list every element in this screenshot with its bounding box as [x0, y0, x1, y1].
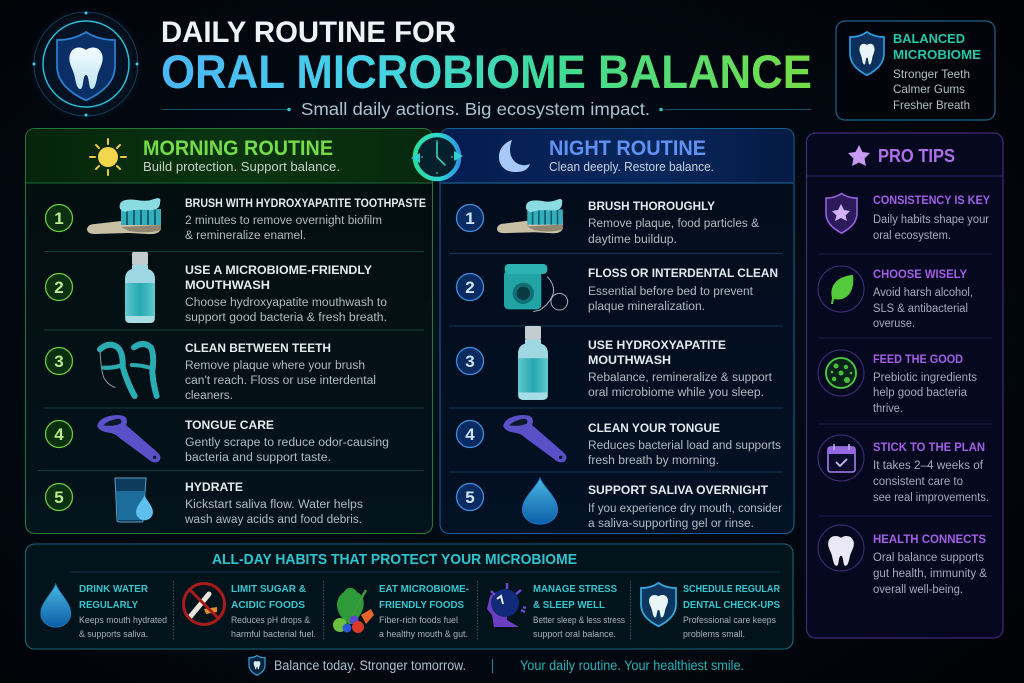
night step 2: 2	[465, 278, 475, 297]
title line 1: DAILY ROUTINE FOR	[161, 16, 456, 49]
tip: feed the good: help good bacteria	[873, 387, 968, 399]
habit: food: EAT MICROBIOME-	[379, 583, 469, 595]
habit: stress and sleep: & SLEEP WELL	[533, 599, 606, 611]
icon: glass of water	[115, 478, 153, 522]
habit: dental check-up: problems small.	[683, 629, 745, 640]
tip: choose wisely	[818, 266, 973, 330]
tip: stick to the plan: STICK TO THE PLAN	[873, 442, 985, 454]
habit: stress and sleep: Better sleep & less stress	[533, 615, 625, 626]
night step 4: 4	[465, 425, 475, 444]
night subheading: Clean deeply. Restore balance.	[549, 160, 714, 174]
footer left tagline: Balance today. Stronger tomorrow.	[274, 658, 466, 673]
balanced list: Stronger Teeth	[893, 67, 970, 81]
tip: consistency	[826, 194, 990, 242]
night step 5	[456, 478, 782, 530]
habit: water	[41, 583, 167, 640]
night step 3: MOUTHWASH	[588, 355, 671, 367]
tip: feed the good	[818, 350, 977, 415]
night heading: NIGHT ROUTINE	[549, 137, 706, 160]
morning step 4	[46, 415, 389, 464]
morning step 5: HYDRATE	[185, 482, 243, 494]
icon: floss box	[504, 264, 568, 312]
morning step 2: USE A MICROBIOME-FRIENDLY	[185, 265, 372, 277]
morning step 2: Choose hydroxyapatite mouthwash to	[185, 297, 387, 309]
habit: dental check-up	[641, 583, 780, 640]
footer	[249, 656, 744, 675]
panel: pro tips	[806, 133, 1003, 638]
tip: stick to the plan	[818, 435, 989, 504]
footer right tagline: Your daily routine. Your healthiest smile.	[520, 658, 744, 673]
balanced list: Fresher Breath	[893, 98, 970, 112]
balanced heading	[893, 32, 981, 62]
habit: stress and sleep: MANAGE STRESS	[533, 583, 617, 595]
tip: consistency: Daily habits shape your	[873, 214, 989, 226]
morning step 3: Remove plaque where your brush	[185, 360, 365, 372]
tip: feed the good: FEED THE GOOD	[873, 354, 963, 366]
tip: consistency: CONSISTENCY IS KEY	[873, 195, 990, 207]
morning step 3: 3	[54, 352, 64, 371]
night step 3: oral microbiome while you sleep.	[588, 387, 764, 399]
title line 2: ORAL MICROBIOME BALANCE	[161, 45, 812, 98]
tip: health connects: gut health, immunity &	[873, 568, 987, 580]
tip: health connects: overall well-being.	[873, 584, 963, 596]
night step 1: 1	[465, 209, 475, 228]
tip: feed the good: thrive.	[873, 403, 903, 415]
icon: clock with circular arrows	[411, 134, 463, 180]
morning step 2: support good bacteria & fresh breath.	[185, 312, 387, 324]
morning step 2	[46, 252, 387, 324]
pro tips heading	[848, 145, 955, 166]
tip: choose wisely: Avoid harsh alcohol,	[873, 287, 973, 299]
habit: stress and sleep	[487, 583, 625, 640]
icon: sun	[90, 139, 126, 175]
balanced heading: MICROBIOME	[893, 48, 981, 62]
icon: flossers	[100, 344, 157, 396]
night step 5: 5	[465, 488, 475, 507]
habit: food	[333, 583, 469, 640]
morning step 5: wash away acids and food debris.	[184, 514, 362, 526]
panel: balanced microbiome	[836, 21, 995, 120]
night step 3: USE HYDROXYAPATITE	[588, 340, 726, 352]
morning step 2: MOUTHWASH	[185, 280, 270, 292]
night step 4	[456, 415, 781, 467]
balanced heading: BALANCED	[893, 32, 965, 46]
morning step 1	[46, 198, 426, 242]
morning step 4: 4	[54, 425, 64, 444]
icon: shield tooth	[850, 32, 884, 75]
habit: sugar: LIMIT SUGAR &	[231, 583, 306, 595]
night header	[441, 129, 793, 183]
habit: sugar: ACIDIC FOODS	[231, 599, 305, 611]
morning step 3	[46, 343, 376, 402]
night step 3: Rebalance, remineralize & support	[588, 372, 773, 384]
night step 4: Reduces bacterial load and supports	[588, 440, 781, 452]
tip: stick to the plan: see real improvements.	[873, 492, 989, 504]
morning step 1: 1	[54, 209, 64, 228]
habit: food: a healthy mouth & gut.	[379, 629, 468, 640]
morning step 3: CLEAN BETWEEN TEETH	[185, 343, 331, 355]
tip: health connects	[818, 525, 987, 596]
morning step 5: Kickstart saliva flow. Water helps	[185, 499, 363, 511]
night step 1: Remove plaque, food particles &	[588, 218, 759, 230]
morning step 3: can't reach. Floss or use interdental	[185, 375, 376, 387]
night step 2	[456, 264, 778, 313]
night step 3	[456, 326, 773, 400]
habit: sugar: harmful bacterial fuel.	[231, 629, 316, 640]
habit: water: REGULARLY	[79, 599, 138, 611]
night step 2: Essential before bed to prevent	[588, 286, 754, 298]
night step 1	[456, 199, 759, 246]
icon: footer shield	[249, 656, 265, 675]
morning step 4: Gently scrape to reduce odor-causing	[185, 437, 389, 449]
tip: feed the good: Prebiotic ingredients	[873, 372, 977, 384]
pro tips heading: PRO TIPS	[878, 145, 955, 166]
morning subheading: Build protection. Support balance.	[143, 160, 340, 174]
morning step 3: cleaners.	[185, 390, 233, 402]
tip: choose wisely: CHOOSE WISELY	[873, 269, 967, 281]
morning step 4: TONGUE CARE	[185, 420, 274, 432]
night step 1: daytime buildup.	[588, 234, 677, 246]
habit: dental check-up: DENTAL CHECK-UPS	[683, 599, 780, 611]
subtitle: Small daily actions. Big ecosystem impact.	[301, 99, 650, 119]
tip: stick to the plan: It takes 2–4 weeks of	[873, 460, 984, 472]
tip: consistency: oral ecosystem.	[873, 230, 951, 242]
tip: health connects: Oral balance supports	[873, 552, 984, 564]
tip: choose wisely: overuse.	[873, 318, 915, 330]
night step 2: FLOSS OR INTERDENTAL CLEAN	[588, 268, 778, 280]
tip: choose wisely: SLS & antibacterial	[873, 303, 968, 315]
habits heading: ALL-DAY HABITS THAT PROTECT YOUR MICROBIOME	[212, 551, 577, 568]
night step 2: plaque mineralization.	[588, 301, 705, 313]
panel: morning routine	[26, 128, 432, 534]
morning step 5	[46, 478, 363, 526]
balanced list: Calmer Gums	[893, 82, 965, 96]
habit: water: & supports saliva.	[79, 629, 148, 640]
balanced list	[893, 67, 970, 112]
header	[28, 6, 812, 122]
morning step 4: bacteria and support taste.	[185, 452, 331, 464]
night step 1: BRUSH THOROUGHLY	[588, 201, 715, 213]
habit: sugar	[184, 583, 316, 640]
morning header	[26, 129, 432, 183]
morning step 1: 2 minutes to remove overnight biofilm	[185, 215, 382, 227]
habit: dental check-up: Professional care keeps	[683, 615, 776, 626]
night step 4: CLEAN YOUR TONGUE	[588, 423, 720, 435]
morning step 1: & remineralize enamel.	[185, 230, 306, 242]
icon: moon	[499, 140, 530, 172]
tip: health connects: HEALTH CONNECTS	[873, 534, 986, 546]
panel: all-day habits	[26, 544, 793, 649]
habit: food: Fiber-rich foods fuel	[379, 615, 458, 626]
habit: food: FRIENDLY FOODS	[379, 599, 464, 611]
habit: water: Keeps mouth hydrated	[79, 615, 167, 626]
logo: tooth shield	[28, 6, 144, 122]
morning step 1: BRUSH WITH HYDROXYAPATITE TOOTHPASTE	[185, 198, 426, 210]
morning step 5: 5	[54, 488, 64, 507]
night step 5: SUPPORT SALIVA OVERNIGHT	[588, 485, 768, 497]
tip: stick to the plan: consistent care to	[873, 476, 963, 488]
habit: water: DRINK WATER	[79, 583, 148, 595]
night step 5: If you experience dry mouth, consider	[588, 503, 782, 515]
night step 3: 3	[465, 352, 475, 371]
habit: stress and sleep: support oral balance.	[533, 629, 616, 640]
night step 5: a saliva-supporting gel or rinse.	[588, 518, 754, 530]
habit: sugar: Reduces pH drops &	[231, 615, 311, 626]
night step 4: fresh breath by morning.	[588, 455, 719, 467]
morning step 2: 2	[54, 278, 64, 297]
morning heading: MORNING ROUTINE	[143, 137, 333, 160]
panel: night routine	[440, 128, 794, 534]
habit: dental check-up: SCHEDULE REGULAR	[683, 583, 780, 595]
